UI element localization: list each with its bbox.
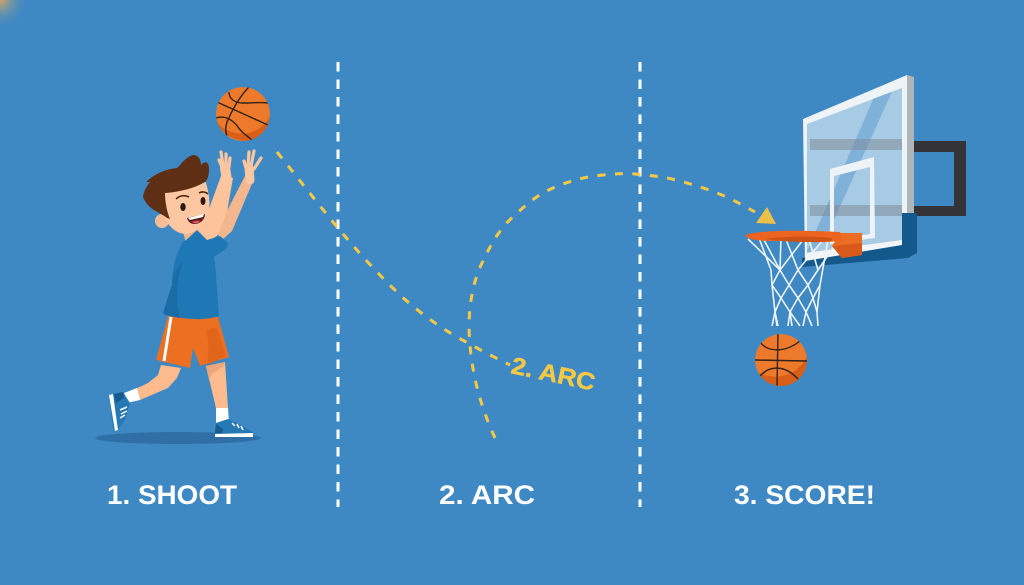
arrow: arc dashed path bbox=[469, 174, 755, 438]
ground shadow bbox=[95, 432, 261, 444]
rim bracket bbox=[832, 233, 862, 258]
divider: right bbox=[638, 62, 642, 507]
rim bbox=[745, 231, 841, 242]
step label: 2. ARC: 2. ARC bbox=[439, 480, 535, 510]
eyebrows bbox=[176, 192, 208, 199]
step label: 1. SHOOT: 1. SHOOT bbox=[107, 480, 238, 510]
back leg bbox=[133, 365, 181, 400]
shorts bbox=[156, 316, 229, 368]
face bbox=[163, 180, 209, 234]
net bbox=[748, 236, 837, 326]
shirt bbox=[163, 230, 219, 319]
eyes bbox=[180, 203, 186, 211]
hair bbox=[143, 155, 209, 219]
socks bbox=[124, 388, 229, 423]
front shoe bbox=[215, 419, 253, 437]
backboard and hoop bbox=[745, 75, 966, 326]
glass bbox=[807, 88, 902, 258]
figure: player shooting bbox=[95, 151, 261, 444]
arrowhead bbox=[756, 207, 776, 224]
basketball: through the net bbox=[755, 334, 807, 386]
sleeve bbox=[181, 230, 228, 270]
board frame bbox=[803, 75, 907, 265]
target square bbox=[830, 157, 875, 244]
shorts stripe bbox=[164, 317, 171, 361]
near arm bbox=[197, 176, 233, 242]
front leg bbox=[206, 362, 228, 408]
neck bbox=[183, 228, 202, 243]
path label: 2. ARC: 2. ARC bbox=[509, 352, 598, 397]
far hand bbox=[244, 151, 261, 180]
arrow: first dashed path bbox=[277, 152, 510, 365]
ear bbox=[155, 214, 169, 228]
near hand bbox=[219, 152, 230, 180]
gray bands bbox=[810, 139, 902, 216]
bottom frame bbox=[805, 240, 902, 261]
glass band bbox=[807, 92, 892, 253]
step label: 3. SCORE!: 3. SCORE! bbox=[734, 480, 875, 510]
mouth bbox=[187, 214, 205, 224]
divider: left bbox=[336, 62, 340, 507]
support bracket bbox=[912, 141, 966, 216]
board side edge bbox=[907, 75, 914, 214]
far arm bbox=[216, 176, 254, 240]
back shoe bbox=[109, 392, 130, 431]
basketball: in air bbox=[216, 87, 270, 141]
blue lower mount bbox=[802, 213, 917, 267]
